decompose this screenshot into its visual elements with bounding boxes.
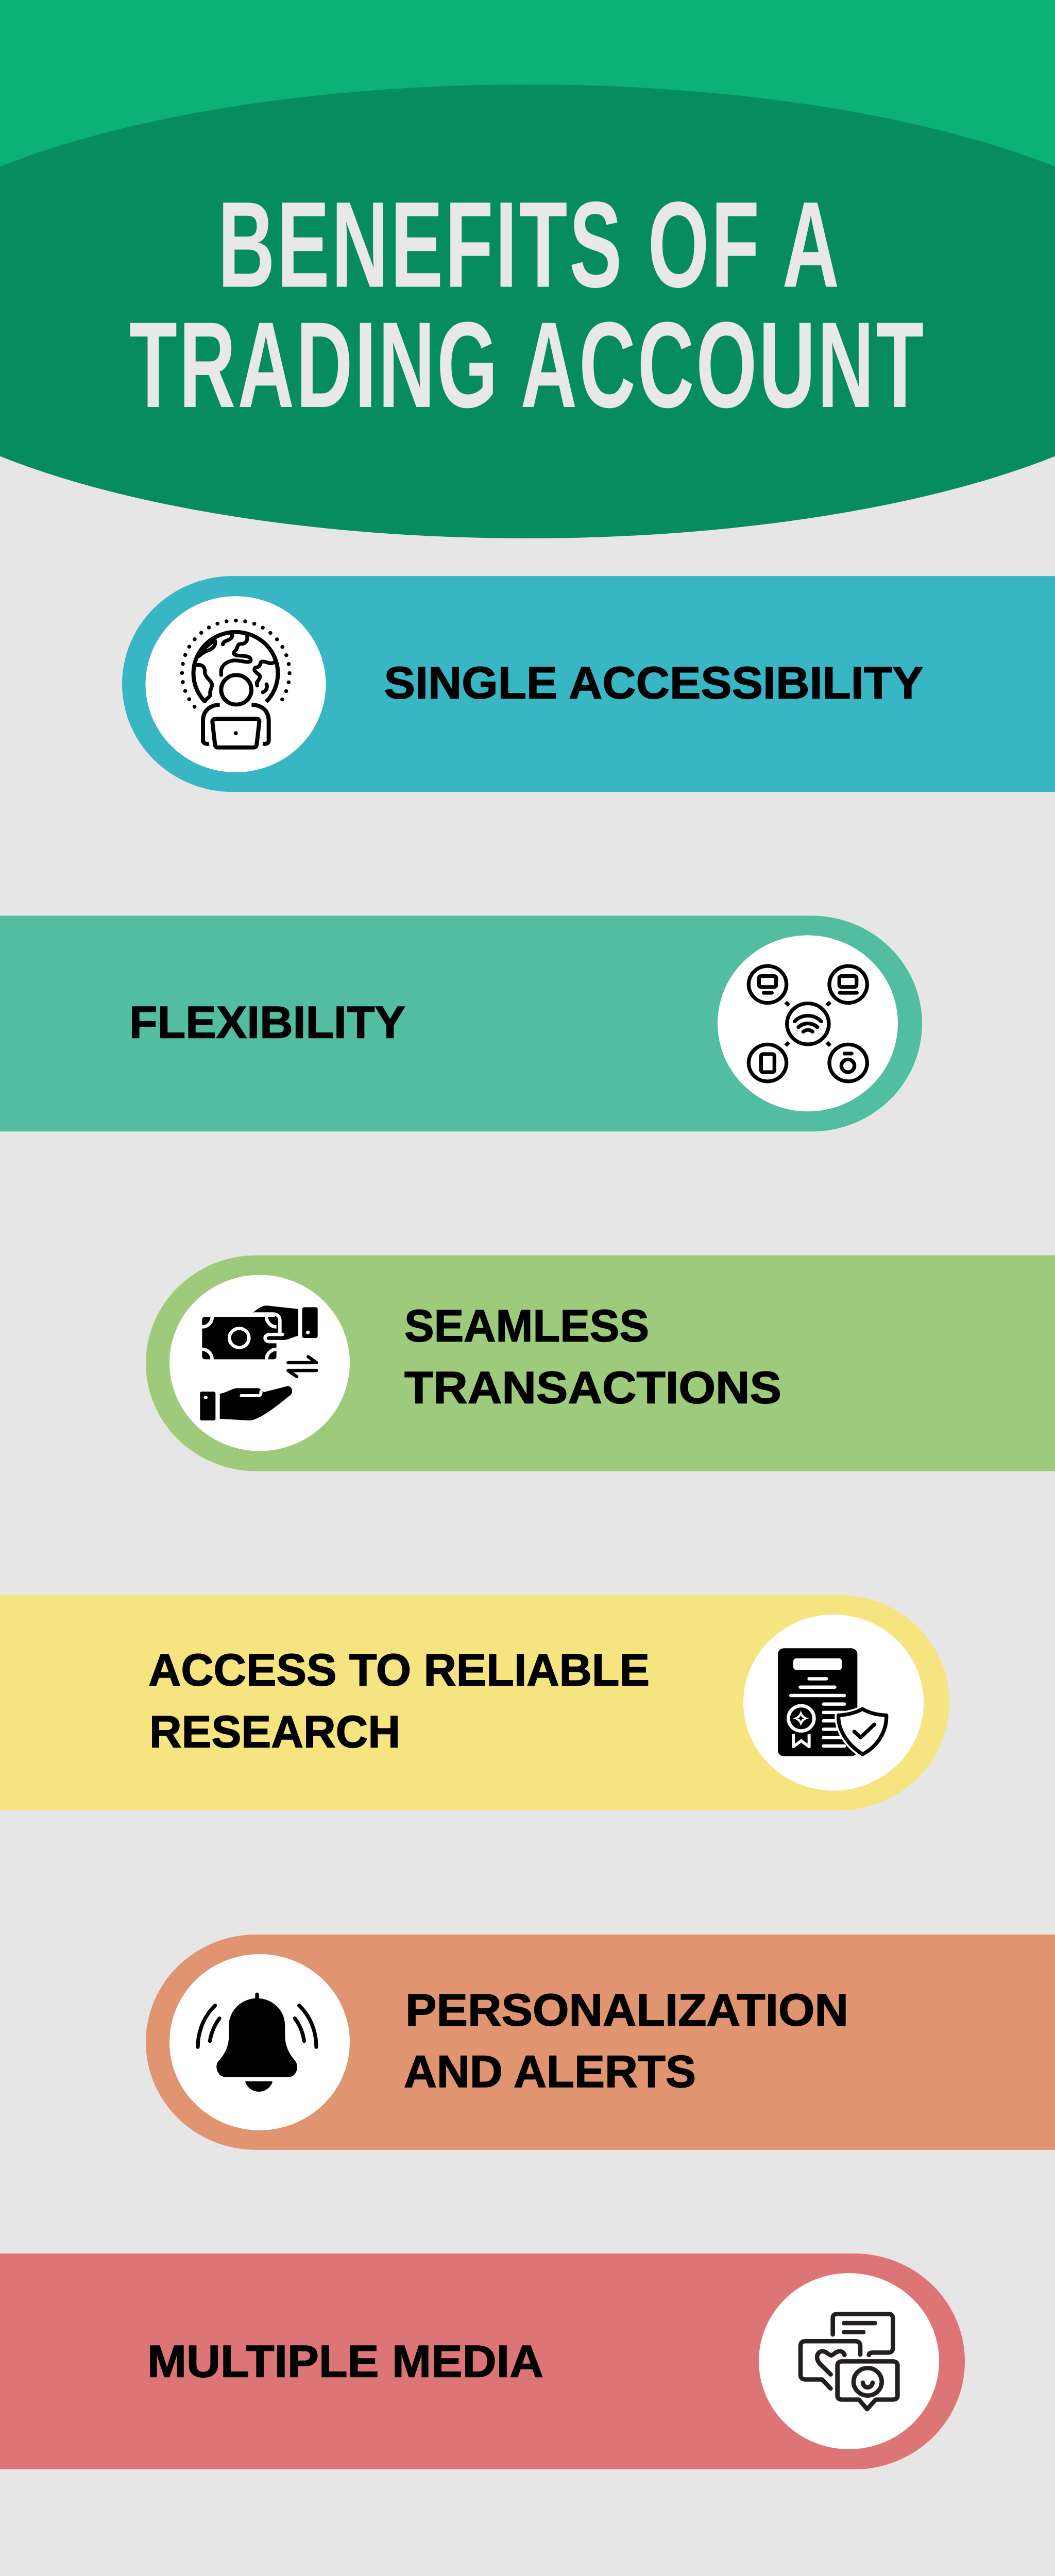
label: ACCESS TO RELIABLE bbox=[148, 1645, 650, 1696]
label: RESEARCH bbox=[149, 1707, 400, 1757]
label bbox=[404, 1986, 848, 2097]
label bbox=[404, 1301, 781, 1413]
panel: seamless transactions bbox=[146, 1256, 1055, 1471]
icon: ringing bell bbox=[198, 1994, 316, 2092]
panel: single accessibility bbox=[122, 576, 1055, 792]
icon: hands exchanging money bbox=[200, 1306, 318, 1420]
panel: personalization and alerts bbox=[146, 1935, 1055, 2150]
label: SINGLE ACCESSIBILITY bbox=[384, 658, 923, 708]
panel: flexibility bbox=[0, 916, 922, 1131]
icon: chat bubbles bbox=[801, 2314, 897, 2409]
title bbox=[129, 177, 926, 433]
label: TRANSACTIONS bbox=[404, 1363, 781, 1413]
header ellipse bbox=[0, 84, 1055, 538]
label: SEAMLESS bbox=[404, 1301, 649, 1351]
icon: person with globe and laptop bbox=[182, 620, 290, 748]
icon: certified document with shield bbox=[778, 1648, 887, 1756]
label: MULTIPLE MEDIA bbox=[147, 2336, 543, 2387]
icon: connected devices bbox=[748, 966, 867, 1081]
panel: multiple media bbox=[0, 2253, 965, 2469]
label: AND ALERTS bbox=[404, 2047, 696, 2097]
panel: access to reliable research bbox=[0, 1595, 949, 1810]
header bbox=[0, 0, 1055, 538]
label: FLEXIBILITY bbox=[129, 998, 405, 1048]
label bbox=[148, 1645, 650, 1757]
label: PERSONALIZATION bbox=[405, 1986, 848, 2036]
